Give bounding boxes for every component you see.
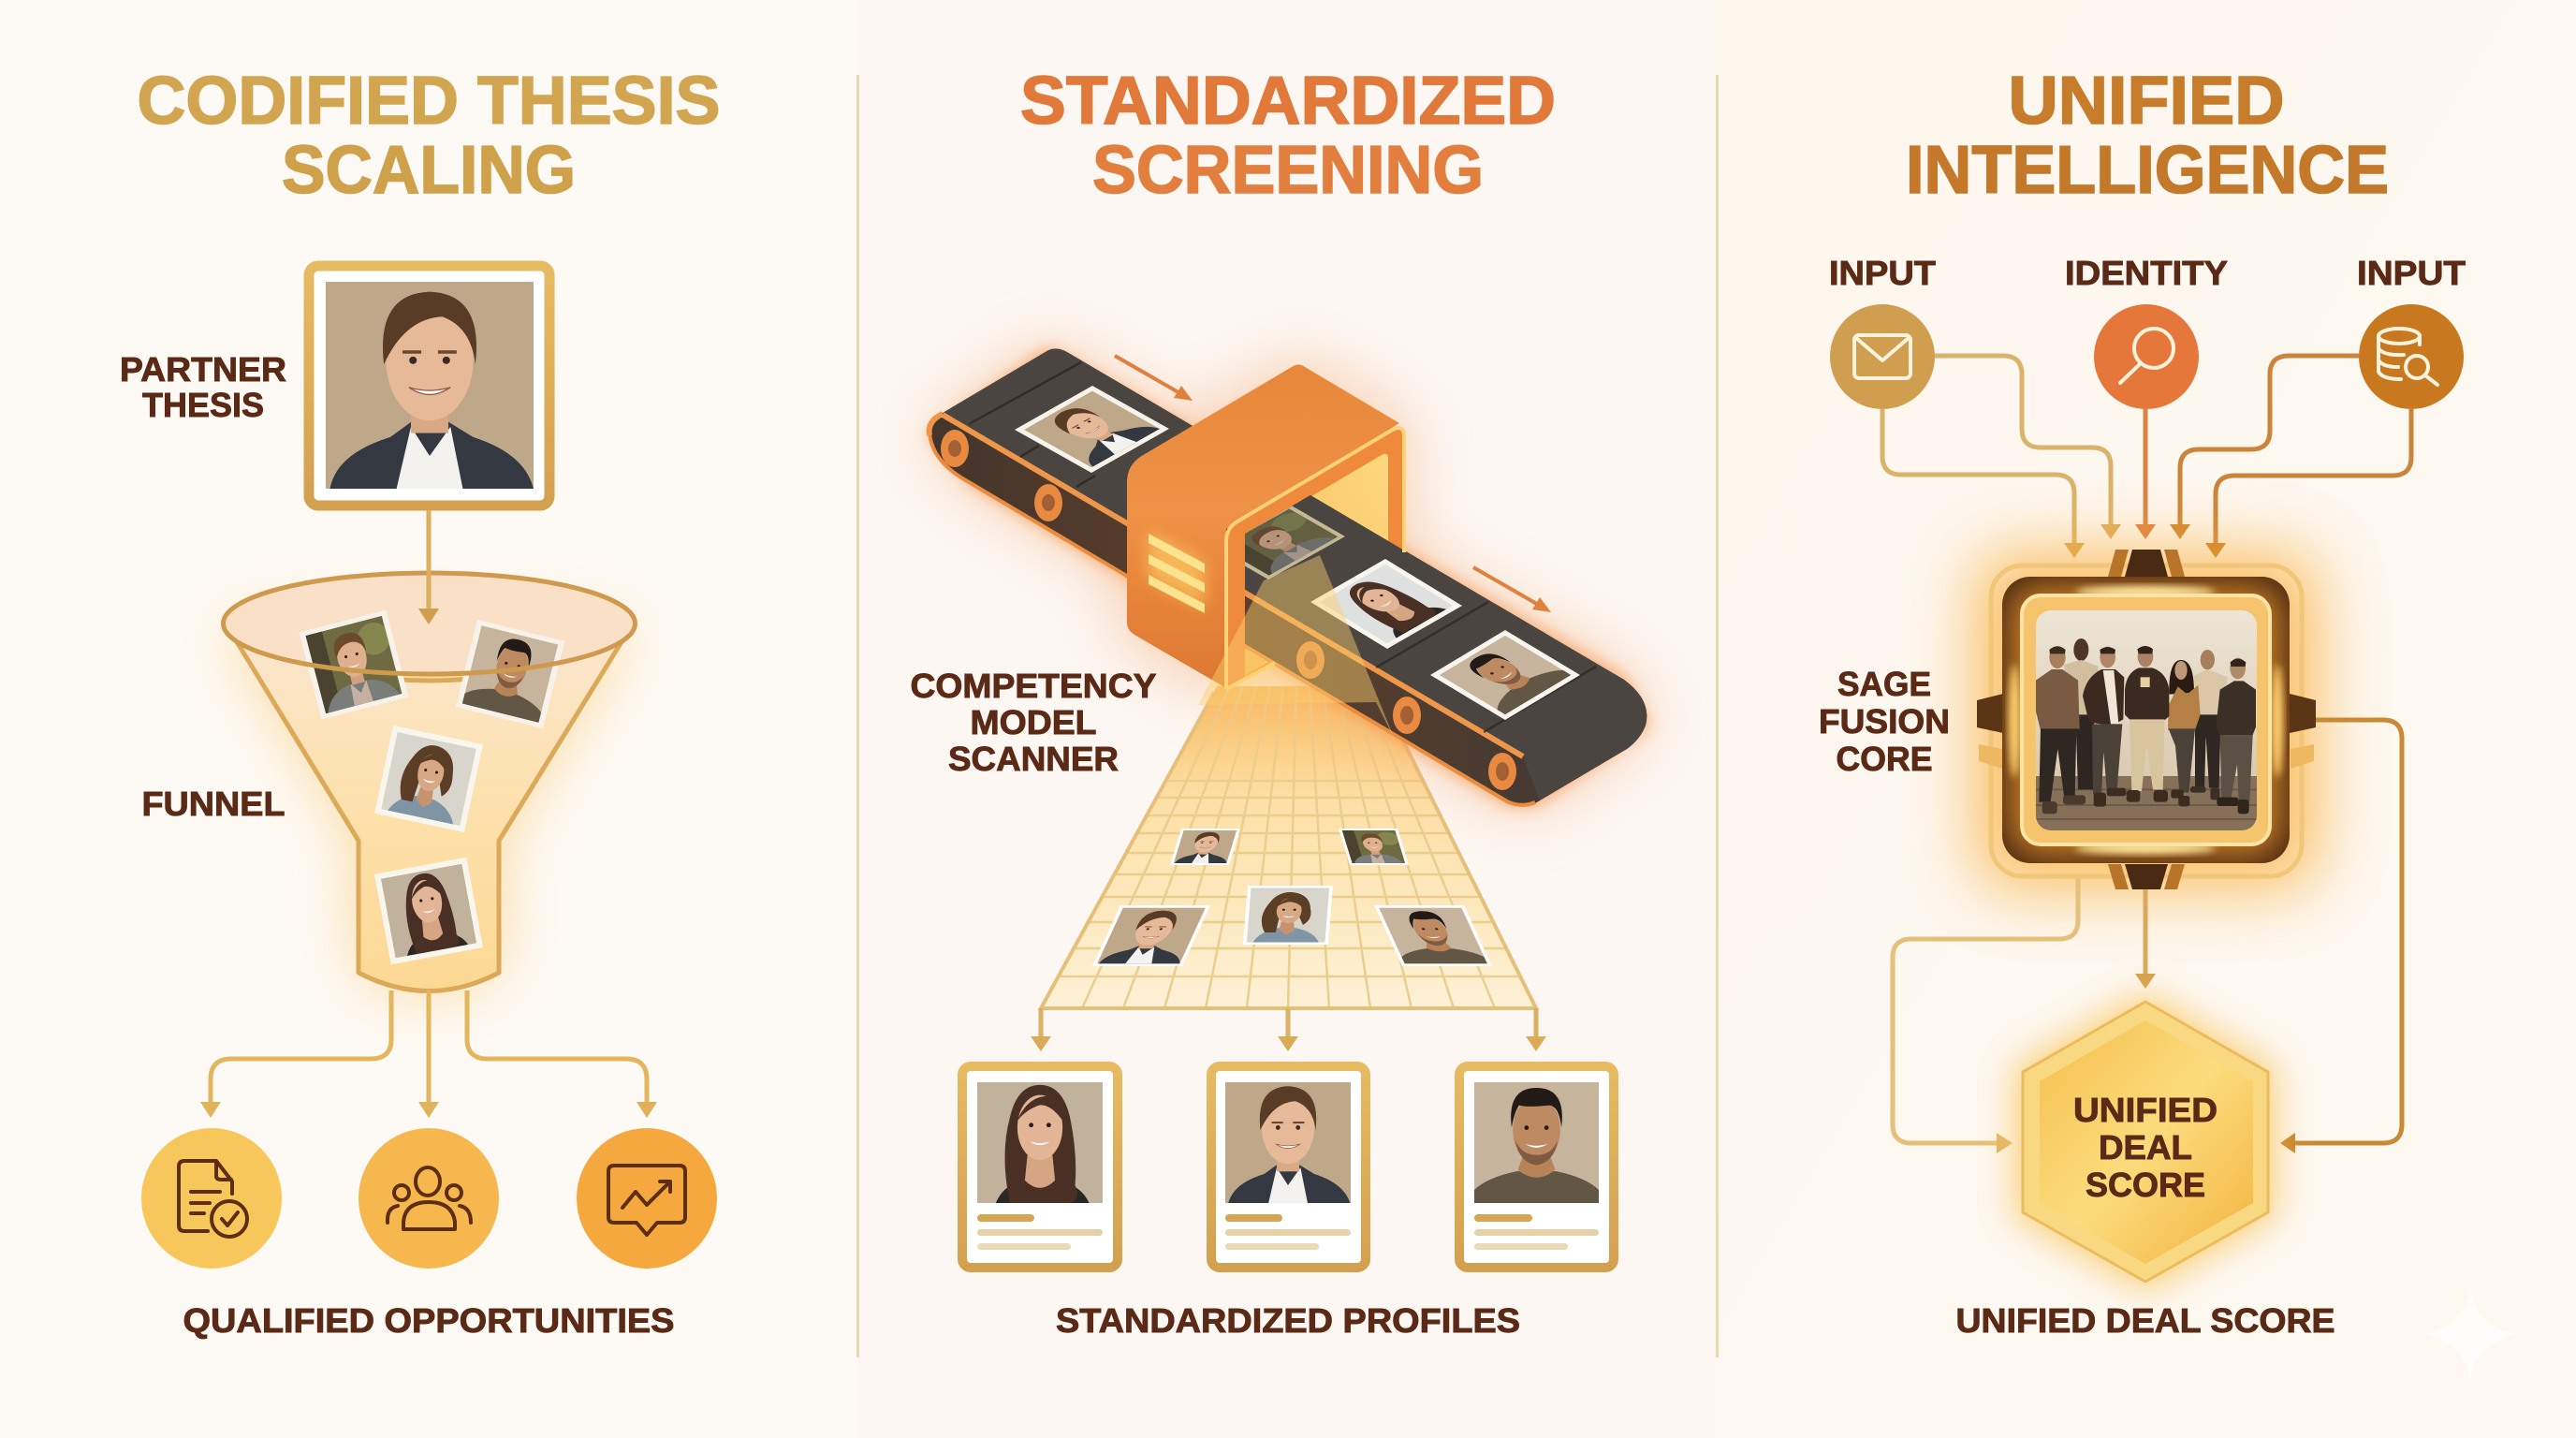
hexagon: unified deal score: UNIFIED xyxy=(2073,1091,2217,1129)
funnel photo 3 xyxy=(374,726,483,832)
scanner vent lights xyxy=(1149,532,1205,613)
title: unified intelligence: UNIFIED xyxy=(2009,64,2284,139)
team member 5 xyxy=(2168,660,2201,806)
belt photo 2 faded xyxy=(1245,506,1345,580)
label: input left: INPUT xyxy=(1829,254,1936,292)
label: sage fusion core: FUSION xyxy=(1819,702,1950,741)
icon: database search xyxy=(2359,304,2464,409)
team member 6 xyxy=(2190,650,2228,800)
belt roller 2 xyxy=(1034,484,1062,521)
icon: magnifier xyxy=(2094,304,2199,409)
grid photo c xyxy=(1092,905,1210,966)
belt photo 1 xyxy=(1015,386,1169,473)
belt roller 4 xyxy=(1393,697,1421,734)
scanner beam overlay xyxy=(1198,555,1395,740)
core connector tabs xyxy=(1977,550,2316,889)
label: competency model scanner xyxy=(910,667,1157,778)
label: competency model scanner: COMPETENCY xyxy=(910,667,1157,705)
conveyor glow xyxy=(927,346,1651,807)
label: sage fusion core: CORE xyxy=(1837,740,1932,778)
scanner projection grid xyxy=(1030,686,1554,1008)
label: partner thesis xyxy=(120,350,286,424)
label: partner thesis: THESIS xyxy=(142,386,264,424)
profile card 3 xyxy=(1459,1066,1614,1268)
title: codified thesis scaling: SCALING xyxy=(282,133,576,208)
arrows: inputs to core xyxy=(1882,356,2411,558)
team member 2 xyxy=(2064,638,2099,789)
arrows: grid to profiles xyxy=(1031,1008,1546,1051)
label: identity: IDENTITY xyxy=(2065,254,2228,292)
sage fusion core frame xyxy=(1977,550,2316,889)
arrow: belt in xyxy=(1115,356,1193,401)
belt photo 3 xyxy=(1310,559,1462,649)
label: input right: INPUT xyxy=(2357,254,2466,292)
profile card 2 xyxy=(1211,1066,1366,1268)
icon: document with check xyxy=(141,1128,282,1269)
title: codified thesis scaling: CODIFIED THESIS xyxy=(137,64,721,139)
arrows: core to score xyxy=(1893,720,2402,1153)
conveyor belt xyxy=(929,348,1647,806)
panel: standardized screening xyxy=(910,64,1651,1340)
arrows: funnel to outputs xyxy=(200,990,657,1118)
team photo xyxy=(2034,610,2259,832)
scanner frame highlight xyxy=(1226,428,1404,689)
title: unified intelligence xyxy=(1906,64,2389,208)
core glow xyxy=(1975,552,2318,889)
label: competency model scanner: MODEL xyxy=(970,703,1097,741)
hexagon: unified deal score: DEAL xyxy=(2099,1128,2192,1167)
panel: codified thesis scaling xyxy=(120,64,721,1340)
conveyor through scanner xyxy=(1245,495,1647,807)
title: standardized screening: STANDARDIZED xyxy=(1020,64,1556,139)
belt roller 3 xyxy=(1296,641,1325,679)
grid photo d xyxy=(1243,886,1333,945)
grid photo e xyxy=(1374,905,1492,966)
funnel glow xyxy=(223,624,636,990)
grid photo b xyxy=(1339,829,1409,865)
title: standardized screening xyxy=(1020,64,1556,208)
belt roller 5 xyxy=(1488,753,1516,790)
title: standardized screening: SCREENING xyxy=(1092,133,1484,208)
team member 4 xyxy=(2125,646,2169,802)
label: sage fusion core xyxy=(1819,665,1950,778)
arrow: thesis to funnel xyxy=(418,510,439,624)
label: sage fusion core: SAGE xyxy=(1837,665,1931,703)
scanner housing xyxy=(1127,365,1404,690)
arrow: belt out xyxy=(1473,567,1551,612)
grid photo a xyxy=(1170,829,1240,865)
score glow xyxy=(2014,992,2276,1292)
team member 3 xyxy=(2083,647,2126,807)
partner portrait frame xyxy=(309,266,549,506)
hexagon: unified deal score xyxy=(2023,1002,2268,1282)
label: competency model scanner: SCANNER xyxy=(948,740,1119,778)
label: funnel: FUNNEL xyxy=(142,785,285,823)
caption: unified deal score: UNIFIED DEAL SCORE xyxy=(1956,1301,2334,1340)
icon: envelope xyxy=(1830,304,1935,409)
label: partner thesis: PARTNER xyxy=(120,350,286,389)
caption: standardized profiles: STANDARDIZED PROFILES xyxy=(1056,1301,1520,1340)
hexagon: unified deal score: SCORE xyxy=(2086,1166,2205,1204)
caption: qualified opportunities: QUALIFIED OPPORTUNITIES xyxy=(183,1301,674,1340)
belt roller 1 xyxy=(941,430,969,467)
funnel photo 4 xyxy=(374,858,483,964)
icon: chat with growth chart xyxy=(577,1128,717,1269)
funnel photo 2 xyxy=(456,620,564,728)
title: codified thesis scaling xyxy=(137,64,721,208)
belt photo 4 xyxy=(1430,630,1580,720)
title: unified intelligence: INTELLIGENCE xyxy=(1906,133,2389,208)
funnel xyxy=(223,573,635,990)
team member 7 xyxy=(2216,658,2256,814)
team member 1 xyxy=(2036,646,2086,814)
icon: people group xyxy=(359,1128,499,1269)
profile card 1 xyxy=(962,1066,1118,1268)
icon: sparkle watermark xyxy=(2425,1289,2515,1379)
panel: unified intelligence xyxy=(1819,64,2515,1379)
funnel photo 1 xyxy=(299,609,409,720)
